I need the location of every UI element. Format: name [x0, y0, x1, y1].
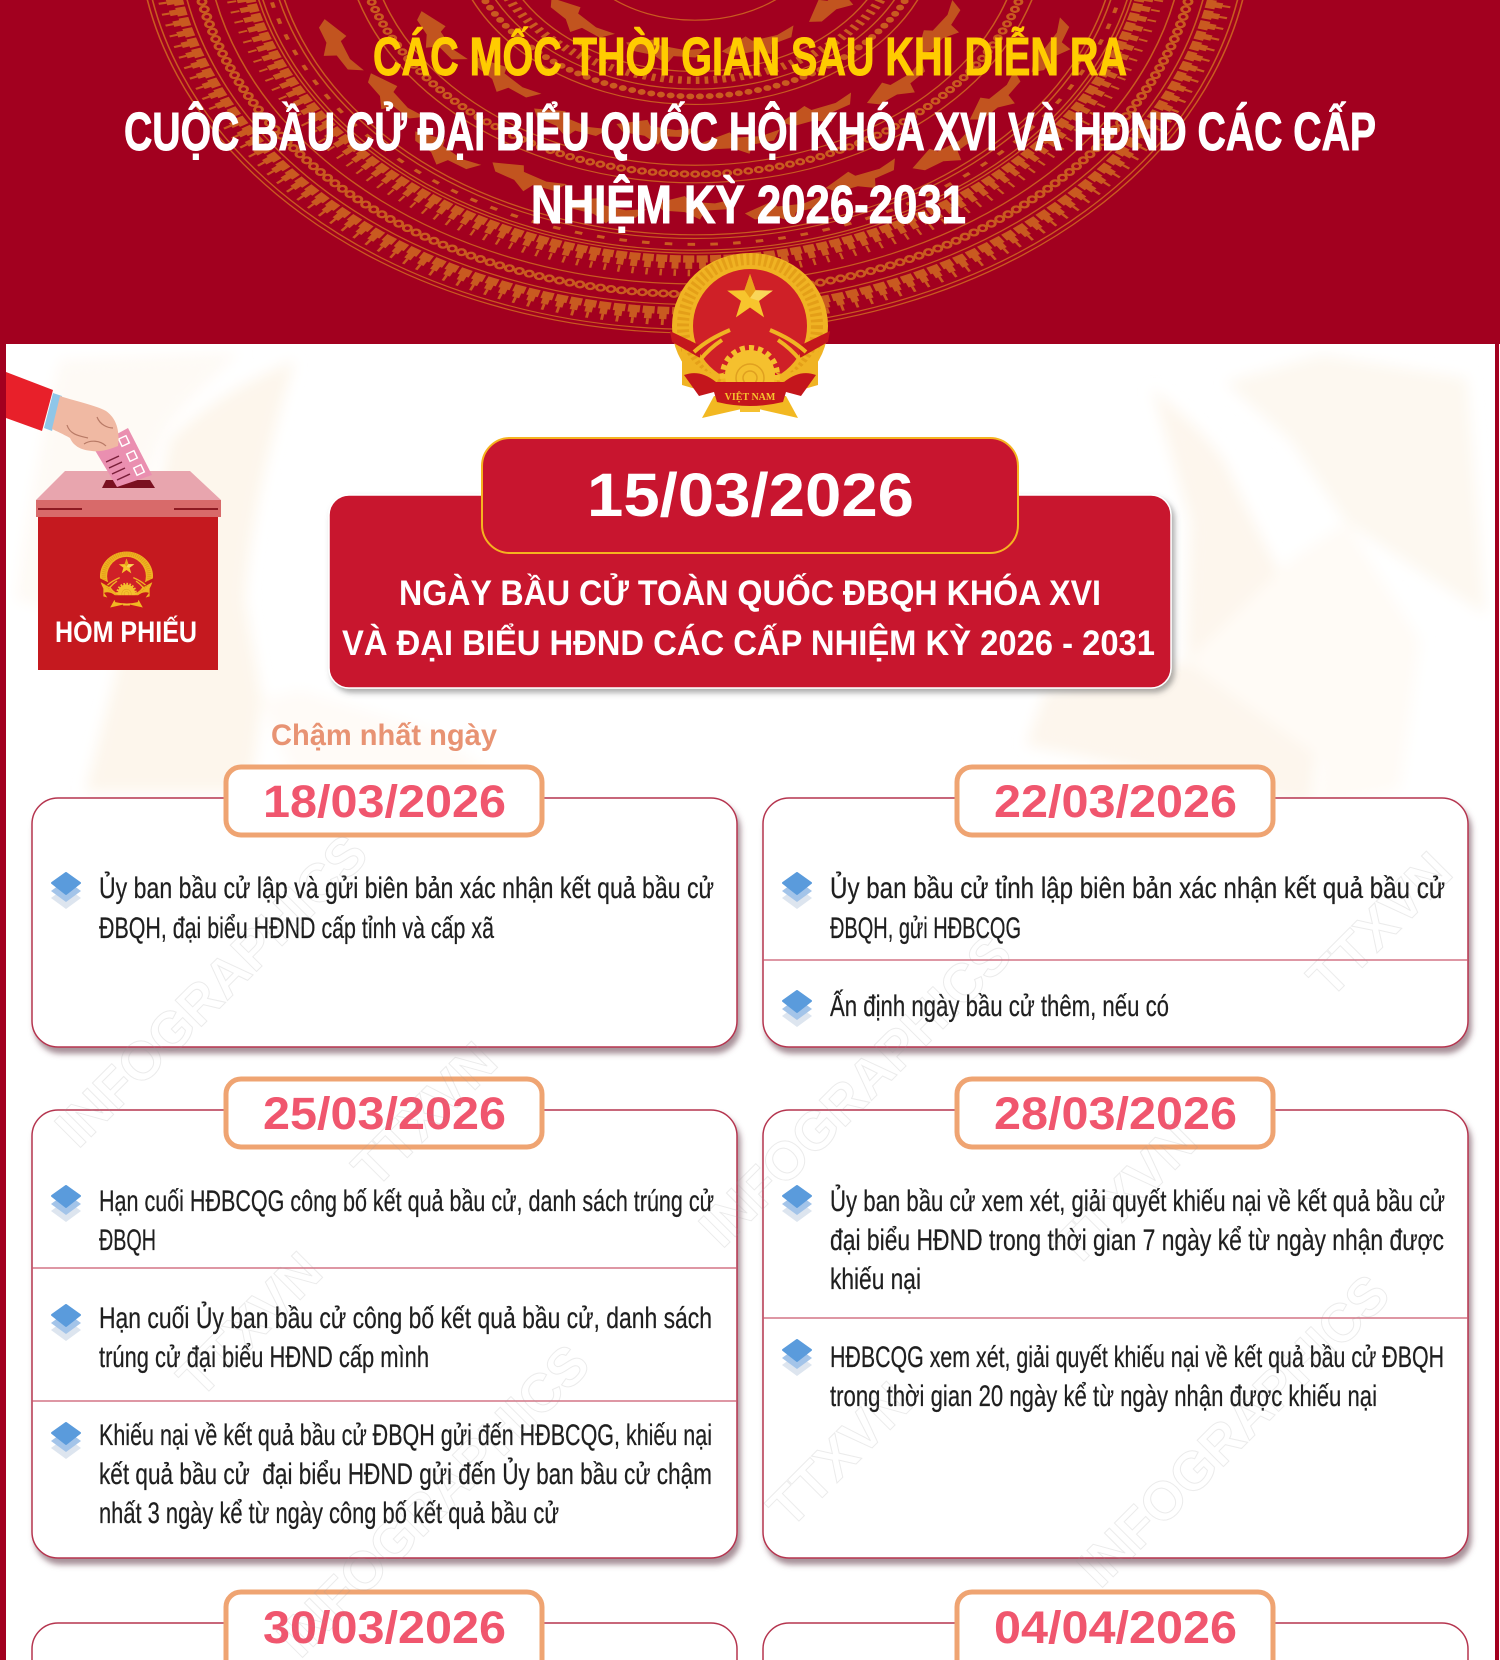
- election description: NGÀY BẦU CỬ TOÀN QUỐC ĐBQH KHÓA XVI: [399, 573, 1101, 613]
- text block: [830, 871, 1445, 945]
- watermark: TTXVN: [756, 1371, 924, 1538]
- text block: Hạn cuối Ủy ban bầu cử công bố kết quả bầu cử, danh sách: [99, 1301, 712, 1335]
- icon: national emblem: VIỆT NAM: [725, 390, 776, 403]
- panel: 30/03/2026: [32, 1592, 737, 1660]
- red page frame sides: [0, 344, 1499, 1660]
- label: ballot box: HÒM PHIẾU: [55, 615, 197, 649]
- icon: stacked layers: [51, 1423, 81, 1459]
- date tag: 30/03/2026: [263, 1602, 506, 1653]
- text block: Ấn định ngày bầu cử thêm, nếu có: [830, 989, 1169, 1023]
- icon: stacked layers: [782, 873, 812, 909]
- text block: khiếu nại: [830, 1263, 921, 1296]
- text block: kết quả bầu cử đại biểu HĐND gửi đến Ủy ban bầu cử chậm: [99, 1457, 712, 1491]
- icon: stacked layers: [782, 991, 812, 1027]
- watermark: [44, 823, 1464, 1660]
- text block: Hạn cuối HĐBCQG công bố kết quả bầu cử, danh sách trúng cử: [99, 1185, 714, 1218]
- panel: 04/04/2026: [763, 1592, 1468, 1660]
- icon: stacked layers: [782, 1186, 812, 1222]
- text block: Khiếu nại về kết quả bầu cử ĐBQH gửi đến HĐBCQG, khiếu nại: [99, 1419, 712, 1452]
- watermark: INFOGRAPHICS: [1066, 1263, 1401, 1598]
- title: [124, 26, 1376, 235]
- date tag: [957, 1079, 1273, 1147]
- watermark: TTXVN: [1041, 1111, 1209, 1278]
- watermark: TTXVN: [166, 1241, 334, 1408]
- text block: [99, 1419, 712, 1530]
- text block: [99, 1301, 712, 1374]
- watermark: TTXVN: [341, 1031, 509, 1198]
- date tag: 28/03/2026: [994, 1088, 1237, 1139]
- text block: ĐBQH, đại biểu HĐND cấp tỉnh và cấp xã: [99, 912, 494, 945]
- election description: [342, 573, 1155, 663]
- bronze drum pattern: [138, 0, 1252, 333]
- text block: nhất 3 ngày kể từ ngày công bố kết quả bầu cử: [99, 1497, 559, 1530]
- title: NHIỆM KỲ 2026-2031: [531, 174, 966, 235]
- title: CÁC MỐC THỜI GIAN SAU KHI DIỄN RA: [373, 26, 1127, 87]
- panel: 25/03/2026: [32, 1079, 737, 1558]
- centre ring motifs: [550, 0, 854, 62]
- text block: Ủy ban bầu cử lập và gửi biên bản xác nhận kết quả bầu cử: [99, 871, 714, 905]
- outer bird ring: [305, 16, 1085, 229]
- text block: [99, 871, 714, 945]
- header band with bronze drum pattern: [0, 0, 1500, 344]
- date tag: [957, 767, 1273, 835]
- date tag: 18/03/2026: [263, 776, 506, 827]
- icon: hand casting ballot into box: [6, 372, 221, 670]
- election date: 15/03/2026: [587, 461, 914, 529]
- watermark: TTXVN: [1296, 841, 1464, 1008]
- decorative peach rays background: [16, 352, 1486, 805]
- icon: stacked layers: [51, 873, 81, 909]
- inner bird ring: [403, 0, 977, 159]
- text block: [830, 1341, 1444, 1413]
- date tag: 22/03/2026: [994, 776, 1237, 827]
- date tag: [226, 1079, 542, 1147]
- text block: trúng cử đại biểu HĐND cấp mình: [99, 1341, 429, 1374]
- election date pill: [482, 438, 1018, 553]
- date tag: [957, 1592, 1273, 1660]
- watermark: INFOGRAPHICS: [266, 1333, 601, 1660]
- icon: national emblem: [670, 253, 830, 418]
- date tag: [226, 767, 542, 835]
- text block: ĐBQH: [99, 1224, 156, 1257]
- panel: 18/03/2026: [32, 767, 737, 1047]
- panel: 28/03/2026: [763, 1079, 1468, 1558]
- election description: VÀ ĐẠI BIỂU HĐND CÁC CẤP NHIỆM KỲ 2026 - 2031: [342, 623, 1155, 663]
- icon: stacked layers: [51, 1305, 81, 1341]
- panel: election day: [329, 438, 1171, 688]
- label: deadline heading: Chậm nhất ngày: [271, 719, 497, 752]
- text block: ĐBQH, gửi HĐBCQG: [830, 912, 1021, 945]
- date tag: 04/04/2026: [994, 1602, 1237, 1653]
- date tag: [226, 1592, 542, 1660]
- icon: stacked layers: [51, 1186, 81, 1222]
- text block: [830, 1184, 1445, 1296]
- icon: small emblem on box: [99, 551, 154, 608]
- date tag: 25/03/2026: [263, 1088, 506, 1139]
- icon: stacked layers: [782, 1340, 812, 1376]
- panel: 22/03/2026: [763, 767, 1468, 1047]
- text block: [99, 1185, 714, 1257]
- watermark: INFOGRAPHICS: [44, 823, 379, 1158]
- watermark: INFOGRAPHICS: [688, 923, 1023, 1258]
